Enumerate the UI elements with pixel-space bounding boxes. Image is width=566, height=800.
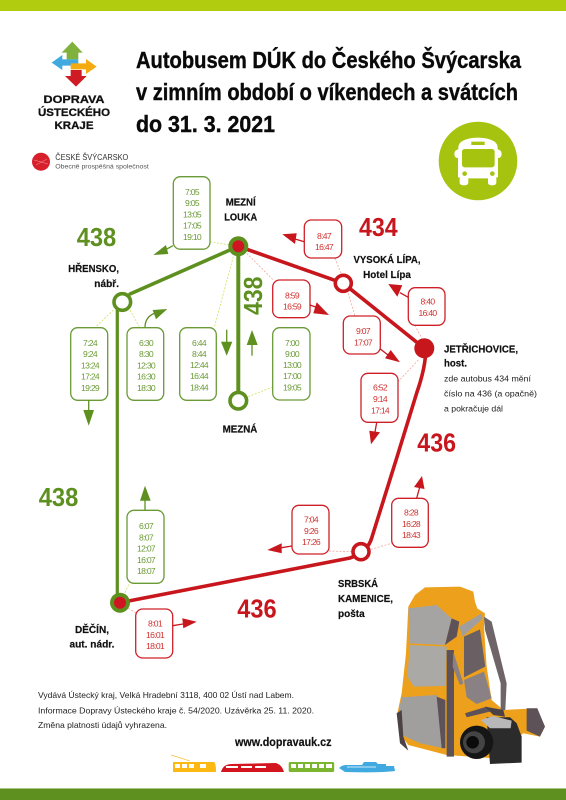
label: Hřensko: nábř. — [94, 278, 119, 290]
route number 438 bottom: 438 — [39, 482, 78, 512]
timetable box: Mezná to Mezní Louka: 19:05 — [283, 382, 302, 392]
stop: Děčín — [110, 593, 130, 613]
timetable box: Mezná to Mezní Louka: 17:00 — [283, 371, 302, 381]
timetable box: Jetřichovice to Vysoká Lípa — [408, 288, 445, 325]
timetable box: Vysoká Lípa to Jetřichovice — [343, 316, 380, 354]
timetable box: Srbská Kamenice to Jetřichovice: 8:28 — [404, 508, 419, 518]
timetable box: Hřensko to Mezní Louka: 8:30 — [139, 349, 154, 359]
label: Mezní Louka: MEZNÍ — [226, 196, 257, 209]
timetable box: Jetřichovice to Vysoká Lípa: 16:40 — [418, 308, 437, 318]
label: Vysoká Lípa — [354, 253, 421, 281]
timetable box: Mezní Louka to Hřensko: 9:05 — [185, 198, 200, 208]
label: Srbská Kamenice: KAMENICE, — [338, 593, 393, 605]
timetable box: Mezná to Mezní Louka: 13:00 — [283, 360, 302, 370]
icon: boat — [339, 762, 395, 772]
route number 438 top: 438 — [77, 222, 116, 252]
title: do 31. 3. 2021 — [136, 111, 275, 137]
timetable box: Mezní Louka to Hřensko: 7:05 — [185, 187, 200, 197]
timetable box: Hřensko to Mezní Louka: 18:30 — [137, 383, 156, 393]
label: Hřensko — [68, 262, 119, 290]
bottom bar — [0, 788, 566, 800]
timetable box: Hřensko to Děčín — [71, 328, 108, 400]
timetable box: Mezní Louka to Mezná: 8:44 — [192, 349, 207, 359]
logo: Doprava Ústeckého kraje: KRAJE — [54, 120, 94, 132]
publisher text: Informace Dopravy Ústeckého kraje č. 54/2020. Uzávěrka 25. 11. 2020. — [38, 705, 314, 715]
backpack with camera illustration — [397, 587, 545, 764]
timetable box: Hřensko to Mezní Louka: 6:30 — [139, 338, 154, 348]
label: Mezní Louka: LOUKA — [224, 212, 258, 224]
timetable box: Vysoká Lípa to Mezní Louka — [304, 220, 342, 258]
timetable box: Vysoká Lípa to Jetřichovice: 17:07 — [354, 338, 373, 348]
icon: train — [221, 763, 284, 772]
timetable box: Děčín to Srbská Kamenice — [136, 609, 173, 658]
timetable box: Hřensko to Děčín: 13:24 — [81, 360, 100, 370]
website: www.dopravauk.cz — [234, 735, 332, 749]
label: Srbská Kamenice — [338, 577, 393, 620]
timetable box: Vysoká Lípa to Jetřichovice: 9:07 — [356, 326, 371, 336]
stop: Srbská Kamenice — [353, 544, 369, 560]
icon: bus — [289, 762, 334, 772]
stop: Hřensko — [114, 294, 131, 310]
timetable box: Děčín to Hřensko: 16:07 — [137, 555, 156, 565]
timetable box: Srbská Kamenice to Jetřichovice — [392, 498, 428, 547]
title: v zimním období o víkendech a svátcích — [136, 79, 518, 105]
timetable box: Hřensko to Děčín: 19:29 — [81, 383, 100, 393]
publisher text: Vydává Ústecký kraj, Velká Hradební 3118, 400 02 Ústí nad Labem. — [38, 690, 294, 700]
top bar — [0, 0, 566, 11]
stop: Vysoká Lípa — [335, 275, 351, 291]
title: Autobusem DÚK do Českého Švýcarska — [136, 46, 521, 73]
label: Jetřichovice: host. — [444, 358, 467, 370]
timetable box: Mezná to Mezní Louka — [273, 328, 310, 400]
timetable box: Hřensko to Děčín: 9:24 — [83, 349, 98, 359]
timetable box: Mezní Louka to Mezná — [180, 328, 216, 400]
route number 438 vertical: 438 — [238, 276, 268, 315]
logo: České Švýcarsko: Obecně prospěšná společnost — [55, 163, 149, 170]
route number 434: 434 — [359, 212, 398, 242]
timetable box: Srbská Kamenice to Děčín: 7:04 — [304, 514, 319, 524]
note: change of line number — [444, 374, 537, 414]
timetable box: Hřensko to Mezní Louka — [127, 328, 164, 400]
label: Děčín: aut. nádr. — [70, 639, 115, 651]
note: change of line number: a pokračuje dál — [444, 404, 503, 414]
timetable box: Jetřichovice to Srbská Kamenice: 17:14 — [371, 406, 390, 416]
timetable box: Mezní Louka to Hřensko: 19:10 — [183, 232, 202, 242]
timetable box: Mezní Louka to Mezná: 18:44 — [190, 382, 209, 392]
timetable box: Mezní Louka to Hřensko: 17:05 — [183, 220, 202, 230]
timetable box: Mezná to Mezní Louka: 7:00 — [285, 338, 300, 348]
timetable box: Vysoká Lípa to Mezní Louka: 16:47 — [315, 242, 334, 252]
logo: Doprava Ústeckého kraje — [38, 42, 110, 132]
label: Vysoká Lípa: Hotel Lípa — [363, 269, 411, 281]
timetable box: Hřensko to Mezní Louka: 16:30 — [137, 372, 156, 382]
timetable box: Jetřichovice to Srbská Kamenice: 6:52 — [373, 382, 388, 392]
timetable box: Srbská Kamenice to Děčín: 17:26 — [302, 537, 321, 547]
timetable box: Srbská Kamenice to Jetřichovice: 18:43 — [402, 530, 421, 540]
timetable box: Děčín to Hřensko: 8:07 — [139, 532, 154, 542]
stop: Jetřichovice — [414, 338, 434, 358]
note: change of line number: zde autobus 434 mění — [444, 374, 532, 384]
timetable box: Děčín to Hřensko: 6:07 — [139, 521, 154, 531]
icon: trolleybus — [171, 755, 216, 772]
label: Jetřichovice: JETŘICHOVICE, — [444, 343, 518, 356]
stop: Mezná — [230, 392, 247, 409]
timetable box: Děčín to Hřensko — [127, 510, 164, 583]
timetable box: Jetřichovice to Srbská Kamenice — [361, 373, 398, 422]
logo: Doprava Ústeckého kraje: ÚSTECKÉHO — [38, 106, 110, 119]
timetable box: Děčín to Srbská Kamenice: 18:01 — [146, 641, 165, 651]
label: Hřensko: HŘENSKO, — [68, 262, 119, 275]
logo: České Švýcarsko: ČESKÉ ŠVÝCARSKO — [55, 153, 128, 162]
publisher text — [38, 690, 314, 730]
timetable box: Děčín to Hřensko: 18:07 — [137, 566, 156, 576]
label: Mezní Louka — [224, 196, 258, 224]
timetable box: Srbská Kamenice to Děčín: 9:26 — [304, 526, 319, 536]
timetable box: Hřensko to Děčín: 7:24 — [83, 338, 98, 348]
timetable box: Děčín to Hřensko: 12:07 — [137, 544, 156, 554]
timetable box: Mezná to Mezní Louka: 9:00 — [285, 349, 300, 359]
timetable box: Jetřichovice to Srbská Kamenice: 9:14 — [373, 394, 388, 404]
label: Vysoká Lípa: VYSOKÁ LÍPA, — [354, 253, 421, 266]
label: Jetřichovice — [444, 343, 518, 370]
route line 438 (green) — [117, 246, 238, 600]
logo: České Švýcarsko — [32, 153, 149, 171]
title — [136, 46, 521, 137]
timetable box: Děčín to Srbská Kamenice: 16:01 — [146, 630, 165, 640]
timetable box: Mezní Louka to Mezná: 16:44 — [190, 371, 209, 381]
logo: Doprava Ústeckého kraje: DOPRAVA — [44, 94, 105, 106]
timetable box: Mezní Louka to Hřensko: 13:05 — [183, 210, 202, 220]
timetable box: Děčín to Srbská Kamenice: 8:01 — [148, 618, 163, 628]
route number 436 bottom: 436 — [237, 594, 277, 624]
stop: Mezní Louka — [228, 236, 248, 256]
timetable box: Mezní Louka to Vysoká Lípa: 8:59 — [285, 290, 300, 300]
note: change of line number: číslo na 436 (a opačně) — [444, 389, 537, 399]
timetable box: Mezní Louka to Mezná: 6:44 — [192, 338, 207, 348]
label: Děčín: DĚČÍN, — [75, 623, 109, 636]
direction arrows (green) — [83, 245, 258, 510]
icon: bus in green circle — [439, 122, 517, 200]
label: Srbská Kamenice: SRBSKÁ — [338, 577, 378, 590]
timetable box: Hřensko to Mezní Louka: 12:30 — [137, 360, 156, 370]
route lines 434 and 436 (red) — [120, 246, 426, 603]
timetable box: Vysoká Lípa to Mezní Louka: 8:47 — [317, 231, 332, 241]
timetable box: Srbská Kamenice to Jetřichovice: 16:28 — [402, 519, 421, 529]
publisher text: Změna platnosti údajů vyhrazena. — [38, 720, 167, 730]
timetable box: Mezní Louka to Vysoká Lípa — [273, 280, 310, 318]
connector dashes — [96, 242, 422, 613]
timetable box: Hřensko to Děčín: 17:24 — [81, 372, 100, 382]
timetable box: Srbská Kamenice to Děčín — [292, 505, 329, 554]
label: Srbská Kamenice: pošta — [338, 608, 365, 620]
route number 436 right: 436 — [417, 428, 456, 458]
label: Děčín — [70, 623, 115, 651]
label: Mezná: MEZNÁ — [223, 423, 258, 436]
timetable box: Mezní Louka to Vysoká Lípa: 16:59 — [283, 302, 302, 312]
timetable box: Jetřichovice to Vysoká Lípa: 8:40 — [421, 296, 435, 306]
direction arrows (red) — [173, 233, 424, 628]
timetable box: Mezní Louka to Mezná: 12:44 — [190, 360, 209, 370]
timetable box: Mezní Louka to Hřensko — [173, 177, 210, 249]
